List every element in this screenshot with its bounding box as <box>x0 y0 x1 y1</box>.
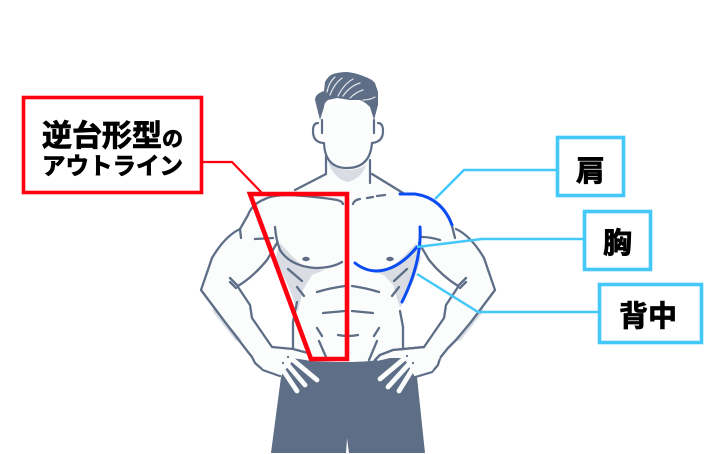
blue muscle highlights <box>355 194 452 302</box>
chest highlight <box>355 247 417 271</box>
label: shoulder <box>558 138 624 196</box>
abdominals <box>288 269 407 360</box>
shorts <box>271 355 425 453</box>
right arm inner <box>375 243 466 360</box>
right fingers <box>380 358 412 391</box>
left knuckle dots <box>282 356 289 364</box>
neck shadow <box>328 162 366 182</box>
connector line: shoulder <box>435 170 556 199</box>
left hand back <box>255 350 294 375</box>
gaps between arms and torso <box>238 243 458 348</box>
red trapezoid outline <box>250 194 347 359</box>
hair highlights <box>327 77 375 100</box>
connector line: back <box>417 274 598 312</box>
left hand <box>255 350 317 391</box>
connector line: outline label <box>203 162 262 193</box>
right shoulder stub <box>452 226 455 238</box>
trapezius <box>295 174 403 193</box>
callout heading: 逆台形型の <box>42 120 183 153</box>
right hand back <box>377 349 440 376</box>
clavicle <box>265 195 385 204</box>
label: back: 背中 <box>619 300 677 333</box>
right arm outer <box>415 229 495 377</box>
chest and back shadows <box>213 162 483 341</box>
figure: muscular man <box>201 72 495 453</box>
shoulder highlight <box>400 194 452 225</box>
right hand <box>375 347 440 391</box>
hair <box>315 72 378 120</box>
label: shoulder: 肩 <box>576 156 605 188</box>
left arm inner <box>230 243 308 353</box>
callout subheading: アウトライン <box>42 153 183 179</box>
callout: inverted trapezoid outline <box>24 98 202 192</box>
face <box>322 105 374 168</box>
label: chest: 胸 <box>603 227 632 260</box>
connector line: chest <box>417 239 583 247</box>
pectorals <box>255 227 440 268</box>
label: chest <box>584 212 650 270</box>
ears <box>313 123 383 143</box>
nipples <box>302 257 394 261</box>
left fingers <box>283 360 317 391</box>
body outlines <box>201 174 495 377</box>
face outline and neck <box>322 120 374 183</box>
label: back <box>600 284 702 342</box>
torso sides <box>293 302 403 349</box>
right knuckle dots <box>406 355 414 364</box>
head <box>313 72 383 183</box>
left shoulder <box>240 199 265 238</box>
right hand outline <box>375 347 424 360</box>
body silhouette fill <box>201 155 495 377</box>
back highlight <box>402 227 420 302</box>
left arm outer <box>201 229 280 376</box>
